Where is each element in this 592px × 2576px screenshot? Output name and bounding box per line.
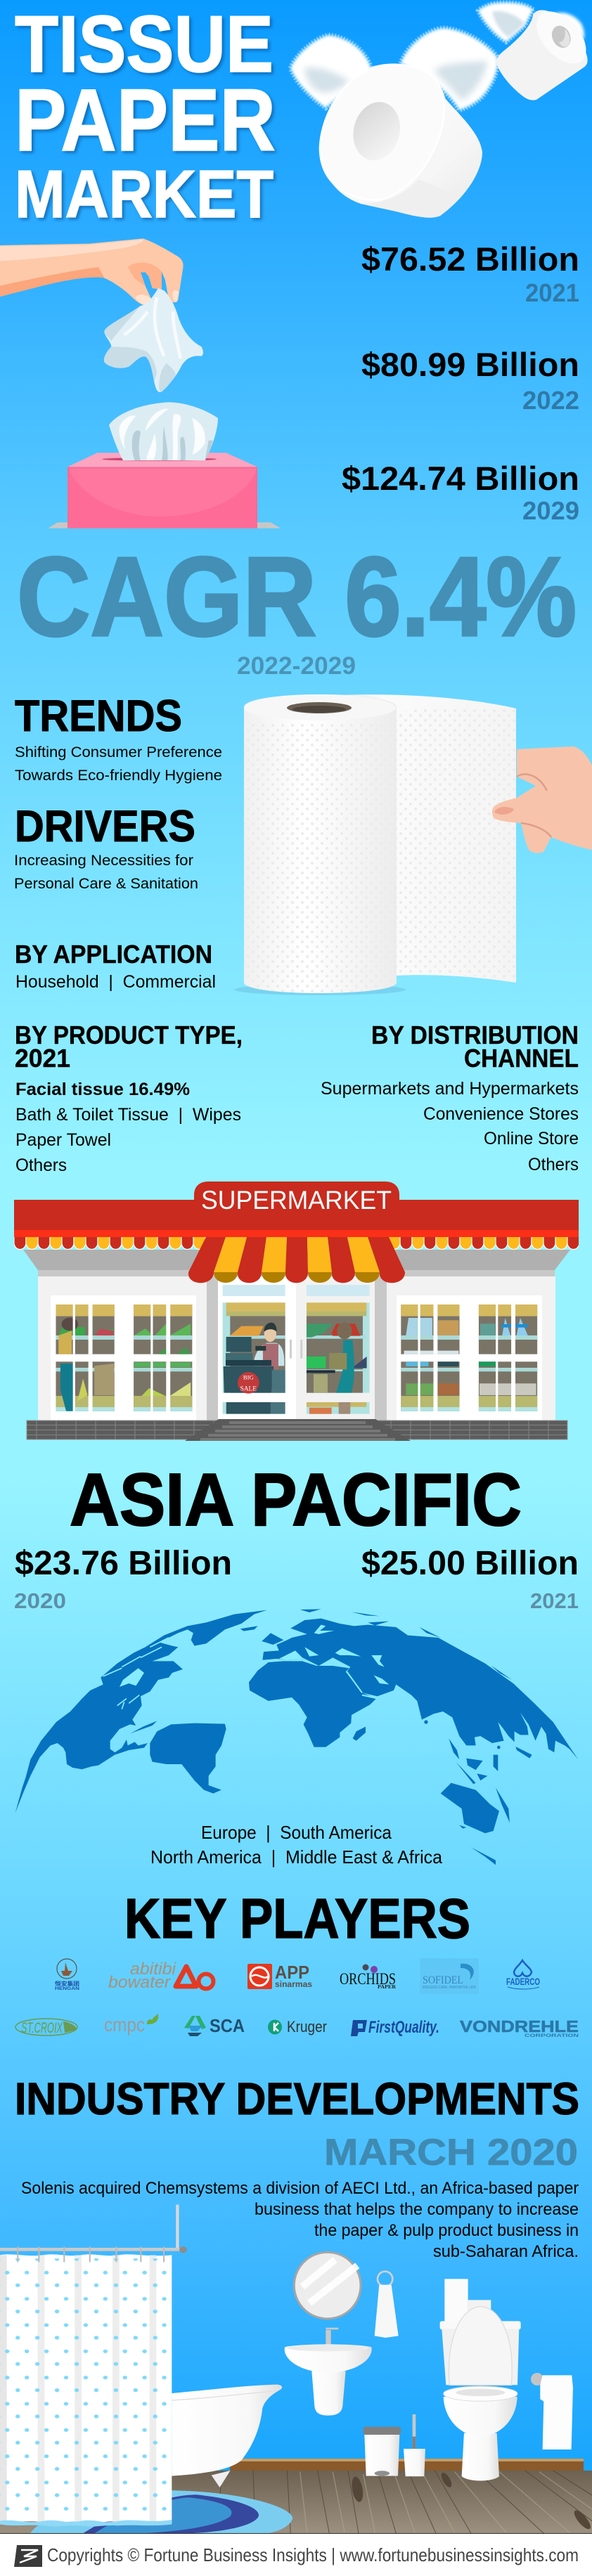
towel [375,2272,399,2338]
curtain [0,2247,172,2526]
toilet [440,2307,521,2481]
logo: VonDrehle: CORPORATION [525,2033,579,2038]
heading: trends: TRENDS [15,692,182,741]
logos [15,1958,579,2038]
value 2022 [361,346,579,415]
development date: MARCH 2020 [324,2132,578,2173]
toilet roll holder [531,2373,573,2449]
development text: sub-Saharan Africa. [433,2242,579,2261]
icon: small roll wings [478,2,584,42]
value 2029: $124.74 Billion [342,460,579,497]
baseboard [230,2459,584,2471]
logo: Kruger [268,2018,327,2035]
brick base and steps [27,1419,567,1441]
tissue box [67,453,257,529]
distribution list: Online Store [484,1129,579,1148]
logo: SCA: SCA [210,2015,245,2036]
by product type [15,1021,243,1175]
heading: application: BY APPLICATION [15,940,212,969]
logo: Orchids Paper: PAPER [378,1984,397,1990]
toilet brush [404,2414,425,2476]
spare rolls [444,2279,491,2324]
entrance doors with cashier and customer [223,1285,370,1414]
drivers text: Increasing Necessities for [14,852,193,869]
logo: Kruger: Kruger [287,2018,327,2035]
title: MARKET [15,157,274,232]
market size values [342,240,579,525]
towel sheet [340,694,516,983]
development text: the paper & pulp product business in [314,2221,579,2240]
distribution list: Supermarkets and Hypermarkets [321,1079,579,1099]
value 2020: 2020 [14,1588,66,1613]
by distribution channel [321,1021,579,1174]
footer rule [0,2533,592,2534]
heading: product type [15,1021,243,1073]
other regions: North America | Middle East & Africa [150,1846,443,1868]
bathroom illustration [0,2205,592,2533]
footer bar [0,2533,592,2576]
logo: APP Sinarmas [247,1962,312,1989]
entrance doors with cashier and customer: BIG [243,1374,254,1381]
tissue hanging [104,288,203,392]
americas [15,1610,267,1813]
Asia Pacific values [14,1545,579,1613]
value 2029 [342,460,579,525]
eurasia [262,1619,578,1759]
title: PAPER [15,72,276,169]
value 2020 [14,1545,232,1613]
logo: abitibi bowater [108,1960,214,1992]
logo: Faderco [506,1960,540,1989]
CAGR period: 2022-2029 [237,652,356,680]
other regions: Europe | South America [201,1822,392,1843]
heading: distribution [371,1021,579,1073]
product list: Bath & Toilet Tissue | Wipes [15,1105,241,1125]
iceland [240,1626,258,1631]
logo: Sofidel [420,1958,479,1994]
rug [30,2490,292,2533]
value 2021: 2021 [530,1588,579,1613]
logo: Sofidel: SOFIDEL [423,1974,463,1986]
roof scallops right [389,1237,579,1250]
supermarket sign: SUPERMARKET [201,1186,392,1215]
heading: product type: 2021 [15,1044,70,1073]
logo: abitibi bowater: abitibi [130,1960,176,1979]
development text: Solenis acquired Chemsystems a division of AECI Ltd., an Africa-based paper [21,2179,579,2198]
development text [21,2179,579,2261]
by application [15,940,216,992]
bathtub [172,2385,282,2487]
drivers [14,802,198,892]
bathroom fixtures [285,2252,573,2481]
application list: Household | Commercial [15,972,216,992]
trends text: Towards Eco-friendly Hygiene [15,767,222,784]
supermarket illustration [14,1182,579,1441]
value 2021: 2021 [525,278,579,307]
icon: small roll [496,2,592,101]
trends text [15,744,222,784]
paper towel roll with hand [234,694,592,995]
logo: CMPC: cmpc [104,2014,145,2035]
icon: fortune business insights logo [14,2545,42,2567]
shop windows [56,1305,537,1411]
distribution list: Others [528,1155,579,1174]
north america and greenland [15,1610,267,1813]
logo: APP Sinarmas: APP [275,1962,309,1983]
heading: distribution: BY DISTRIBUTION [371,1021,579,1049]
icon: large roll [320,65,482,218]
old world and oceania [249,1609,578,1865]
icon: large roll wings [290,28,498,110]
africa [249,1661,376,1747]
distribution list: Convenience Stores [423,1104,579,1124]
tissue in box [109,402,218,460]
logo: Hengan: HENGAN [55,1986,79,1991]
arctic channels [103,1638,169,1676]
development text: business that helps the company to increase [255,2200,579,2219]
inland seas [279,1625,389,1685]
entrance doors with cashier and customer: SALE [240,1386,257,1393]
arm and hand [0,238,184,306]
logo: abitibi bowater: bowater [108,1973,171,1992]
illustration: hand with tissue and tissue box [0,238,281,529]
logo: Sofidel: ENDLESS CARE, INNOVATIVE LIFE [423,1986,476,1990]
heading: distribution: CHANNEL [464,1044,579,1073]
red sea [347,1671,376,1698]
floor [0,2471,592,2533]
logo: APP Sinarmas: sinarmas [275,1979,312,1989]
logo: Orchids Paper [340,1964,397,1990]
curtain rod [0,2205,187,2253]
title: TISSUE [15,0,274,89]
roof sign band [14,1200,579,1230]
floor shadow [48,522,281,529]
footer [0,2533,592,2576]
logo: First Quality: FirstQuality. [368,2018,439,2037]
caribbean islands [130,1721,157,1734]
roof bright edge [14,1230,579,1237]
mirror [294,2252,361,2319]
value 2021 [361,1545,579,1613]
heading: product type: BY PRODUCT TYPE, [15,1021,243,1049]
key players heading: KEY PLAYERS [124,1887,470,1950]
value 2020: $23.76 Billion [15,1545,232,1582]
logo: SCA [184,2015,245,2036]
trends [15,692,222,784]
center awning [188,1237,405,1283]
bin [363,2427,401,2476]
trends text: Shifting Consumer Preference [15,744,222,760]
logo: Faderco: FADERCO [506,1976,540,1987]
product list [15,1080,241,1175]
product list: Paper Towel [15,1130,111,1150]
value 2022: 2022 [522,386,579,415]
hand holding towel [492,746,592,853]
world map [15,1609,578,1865]
drivers text [14,852,198,892]
logo: First Quality [351,2018,439,2037]
sink [285,2328,372,2416]
towel roll [234,694,406,995]
drivers text: Personal Care & Sanitation [14,875,198,892]
logo: Orchids Paper: ORCHIDS [340,1970,396,1988]
building [23,1250,570,1420]
roof scallops left [14,1237,206,1250]
value 2022: $80.99 Billion [361,346,579,383]
value 2021: $76.52 Billion [361,240,579,278]
logo: Hengan [55,1959,79,1991]
Asia Pacific heading: ASIA PACIFIC [70,1458,522,1541]
islands and australia [262,1609,532,1865]
logo: VonDrehle: VONDREHLE [460,2017,579,2035]
product list: Facial tissue 16.49% [15,1080,190,1099]
value 2021: $25.00 Billion [361,1545,579,1582]
logo: Hengan: 恒安集团 [55,1980,79,1987]
title [15,0,276,232]
great lakes [117,1695,139,1709]
other regions [150,1822,443,1868]
value 2029: 2029 [522,496,579,525]
illustration: winged toilet rolls [290,2,592,218]
logo: St Croix: ST.CROIX [21,2020,63,2036]
product list: Others [15,1156,67,1175]
distribution list [321,1079,579,1174]
value 2021 [361,240,579,307]
heading: drivers: DRIVERS [15,802,195,851]
hudson bay [120,1668,144,1687]
south america [150,1723,226,1794]
